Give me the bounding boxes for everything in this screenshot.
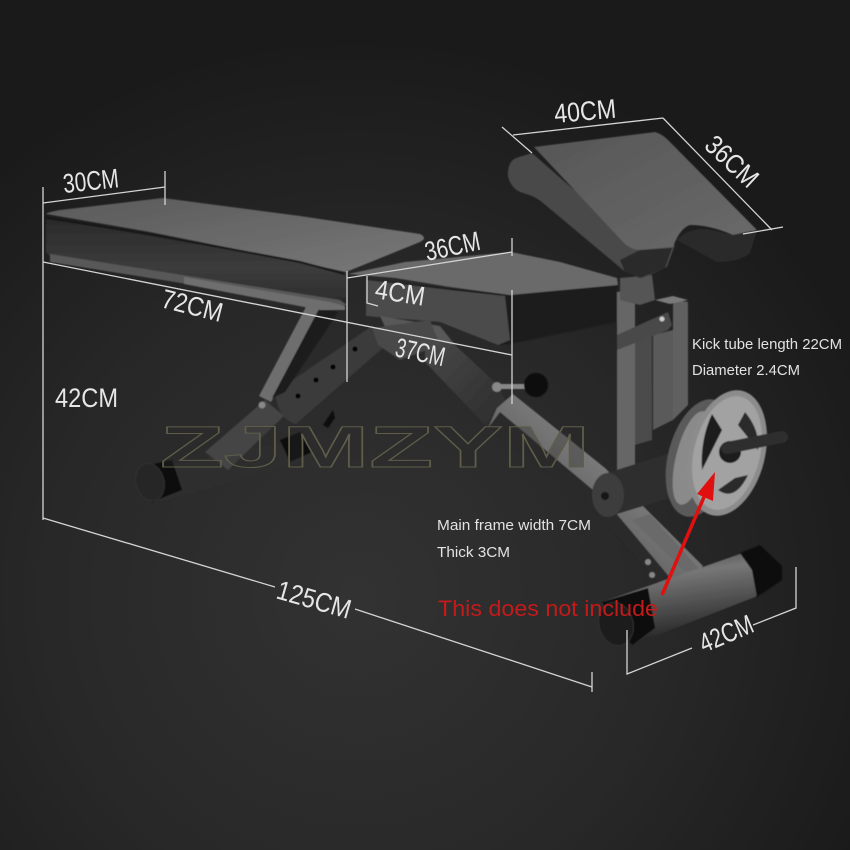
label: 42CM height: 42CM [55,383,118,413]
red note: This does not include [438,596,658,621]
label: 4CM: 4CM [373,274,427,312]
weight plate [654,382,779,524]
back pad [348,252,618,350]
seat pad [46,198,424,310]
main frame [372,320,703,584]
roller pad [592,450,680,517]
weight bar [727,437,782,448]
watermark: ZJMZYM: ZJMZYM [160,415,590,480]
red arrow [662,472,715,595]
label: 40CM: 40CM [553,94,617,129]
text: main frame width: Main frame width 7CM [437,518,591,534]
front foot tube [594,545,782,650]
label: 36CM seat: 36CM [422,226,483,267]
label: 37CM: 37CM [393,333,448,372]
rear legs [205,303,392,470]
uprights [617,275,688,480]
knob [498,373,548,397]
label: 42CM foot: 42CM [695,609,758,659]
label: 72CM: 72CM [159,284,226,328]
arm pad [508,132,757,278]
rear foot tube [132,432,318,504]
text: diameter: Diameter 2.4CM [692,363,800,379]
label: 30CM: 30CM [61,163,120,199]
bench illustration [46,132,782,650]
label: 125CM: 125CM [273,575,355,625]
text: thick: Thick 3CM [437,545,510,561]
label: 36CM arm pad: 36CM [699,129,765,194]
dimension lines [43,118,796,692]
text: kick tube length: Kick tube length 22CM [692,337,842,353]
